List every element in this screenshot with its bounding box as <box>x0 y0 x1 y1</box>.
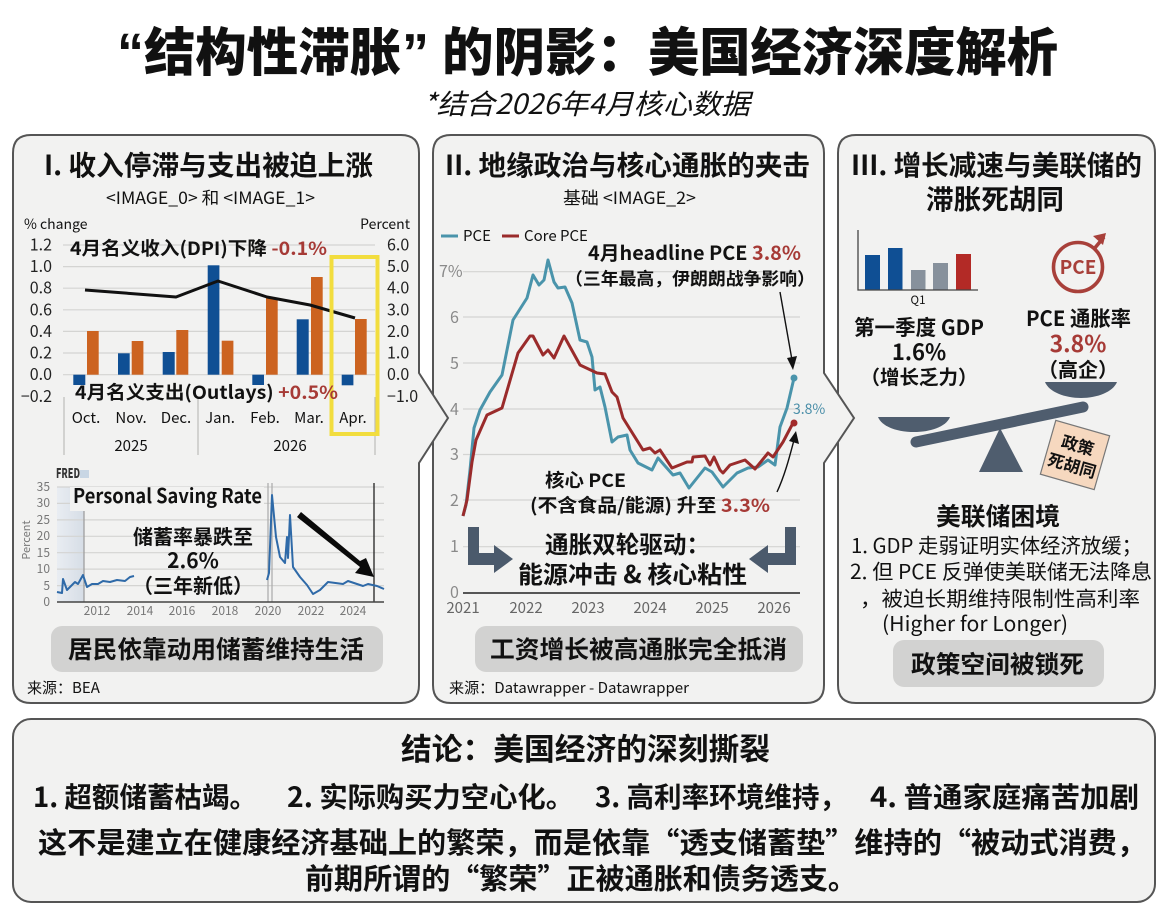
line chart: PCE and core PCE: 3.8% <box>793 399 825 419</box>
text: Fed dilemma: ，被迫长期维持限制性高利率 <box>860 582 1140 612</box>
bar chart: income and outlays: Percent <box>360 214 411 234</box>
text: inflation dual drivers: 能源冲击 & 核心粘性 <box>518 555 747 590</box>
text: Fed dilemma: 1. GDP 走弱证明实体经济放缓； <box>851 529 1142 559</box>
bar chart: income and outlays: 1.0 <box>30 253 52 277</box>
legend: Core PCE <box>524 225 588 246</box>
heading: panel I: I. 收入停滞与支出被迫上涨 <box>44 143 373 183</box>
text: PCE inflation: PCE 通胀率 <box>1026 303 1131 333</box>
icon: GDP bar chart <box>858 230 978 308</box>
line chart: PCE and core PCE <box>439 258 825 618</box>
arrow: to headline PCE point <box>780 292 797 370</box>
line chart: PCE and core PCE: 7% <box>439 258 463 282</box>
line chart: personal saving rate: 2020 <box>255 602 282 619</box>
text: inflation dual drivers <box>518 525 747 590</box>
text: Fed dilemma: 2. 但 PCE 反弹使美联储无法降息 <box>850 555 1152 585</box>
line chart: personal saving rate: 2012 <box>84 602 111 619</box>
legend: PCE <box>463 225 491 246</box>
arrow: saving rate decline <box>297 512 374 577</box>
subheading: image reference: 基础 <IMAGE_2> <box>563 184 696 209</box>
line chart: PCE and core PCE: 1 <box>450 533 459 557</box>
text: Q1 GDP <box>854 312 984 390</box>
line chart: PCE and core PCE: 0 <box>450 579 459 603</box>
heading: panel III <box>851 143 1142 217</box>
bar chart: income and outlays: 0.0 <box>387 361 409 385</box>
line chart: personal saving rate: Personal Saving Rate <box>73 480 262 509</box>
line chart: PCE and core PCE: 2021 <box>446 597 480 618</box>
bar chart: income and outlays: 0.0 <box>30 361 52 385</box>
bar chart: income and outlays: Nov. <box>115 407 147 428</box>
bar chart: income and outlays: 0.4 <box>30 318 52 342</box>
line chart: PCE and core PCE: 2024 <box>633 597 667 618</box>
line chart: PCE and core PCE: 6 <box>450 304 459 328</box>
heading: conclusion: 结论：美国经济的深刻撕裂 <box>401 724 770 769</box>
line chart: personal saving rate: 15 <box>37 544 50 561</box>
line chart: personal saving rate: Percent <box>18 520 34 560</box>
arrow: to core PCE point <box>777 431 799 492</box>
panel: conclusion <box>13 719 1155 902</box>
line chart: personal saving rate: 25 <box>37 511 50 528</box>
line chart: personal saving rate: 35 <box>37 478 50 495</box>
title: ” <box>402 23 429 83</box>
highlight: April box <box>332 257 378 434</box>
text: Q1 GDP: （增长乏力） <box>860 361 978 390</box>
list: four conclusions: 2. 实际购买力空心化。 <box>287 776 574 816</box>
bar chart: income and outlays: 5.0 <box>387 253 409 277</box>
line chart: personal saving rate: 20 <box>37 527 50 544</box>
bar chart: income and outlays: 6.0 <box>387 232 409 256</box>
annotation: saving rate plunge: （三年新低） <box>133 570 253 599</box>
sticky note: policy dead end <box>1040 420 1110 490</box>
text: conclusion summary: 这不是建立在健康经济基础上的繁荣，而是依靠“透支储蓄垫”维持的“被动式消费， <box>38 821 1146 862</box>
line chart: personal saving rate: 2024 <box>340 602 367 619</box>
bar chart: income and outlays: 0.2 <box>30 340 52 364</box>
annotation: saving rate plunge <box>133 521 253 599</box>
line chart: personal saving rate: 2014 <box>127 602 154 619</box>
bar chart: income and outlays: 2025 <box>114 435 148 456</box>
subheading: image references: <IMAGE_0> 和 <IMAGE_1> <box>106 184 315 209</box>
list: four conclusions: 1. 超额储蓄枯竭。 <box>33 776 257 816</box>
line chart: personal saving rate: 30 <box>37 494 50 511</box>
bar chart: income and outlays: 3.0 <box>387 296 409 320</box>
text: Fed dilemma: 美联储困境 <box>936 498 1060 533</box>
annotation: saving rate plunge: 储蓄率暴跌至 <box>133 521 253 550</box>
subtitle: *结合2026年4月核心数据 <box>423 83 754 123</box>
annotation: DPI decline: 4月名义收入(DPI)下降 -0.1% <box>70 235 327 261</box>
callout: households use savings <box>51 626 383 672</box>
line chart: PCE and core PCE: 2 <box>450 487 459 511</box>
panel: geopolitics and core inflation <box>433 135 854 703</box>
line chart: personal saving rate: 2018 <box>212 602 239 619</box>
icon: PCE gauge with rising arrow: PCE <box>1060 253 1096 280</box>
bar chart: income and outlays: Mar. <box>294 407 324 428</box>
bar chart: income and outlays: −1.0 <box>387 383 418 407</box>
line chart: personal saving rate: 2016 <box>169 602 196 619</box>
annotation: core PCE: 核心 PCE <box>545 467 626 493</box>
text: Fed dilemma: (Higher for Longer) <box>882 607 1068 637</box>
bar chart: income and outlays: Oct. <box>72 407 100 428</box>
panel: income stagnation and forced spending <box>13 135 448 703</box>
text: conclusion summary: 前期所谓的“繁荣”正被通胀和债务透支。 <box>305 857 857 898</box>
title <box>117 11 1058 86</box>
source note: 来源：BEA <box>27 677 101 698</box>
line chart: PCE and core PCE: 2026 <box>757 597 791 618</box>
callout: wage growth offset: 工资增长被高通胀完全抵消 <box>490 630 787 666</box>
bar chart: income and outlays: 2026 <box>273 435 307 456</box>
icon: balance scale <box>878 382 1117 472</box>
line chart: personal saving rate: FRED <box>56 463 80 482</box>
bar chart: income and outlays: Feb. <box>250 407 280 428</box>
text: PCE inflation: 3.8% <box>1050 325 1106 359</box>
heading: panel II: II. 地缘政治与核心通胀的夹击 <box>445 143 810 183</box>
text: Q1 GDP: 第一季度 GDP <box>854 312 984 342</box>
bar chart: income and outlays: 0.8 <box>30 274 52 298</box>
line chart: PCE and core PCE: 3 <box>450 441 459 465</box>
title: “ <box>117 23 144 83</box>
bar chart: income and outlays: % change <box>24 214 88 234</box>
title: 的阴影： <box>442 11 648 86</box>
bar chart: income and outlays: −0.2 <box>21 383 52 407</box>
line chart: personal saving rate: 0 <box>43 593 50 610</box>
bar chart: income and outlays: 1.0 <box>387 340 409 364</box>
line chart: personal saving rate <box>18 463 384 619</box>
sticky note: policy dead end: 死胡同 <box>1045 446 1099 483</box>
panel: growth slowdown and Fed dilemma <box>838 135 1155 703</box>
icon: left bent arrow <box>468 527 513 573</box>
annotation: headline PCE: 4月headline PCE 3.8% <box>588 237 801 266</box>
bar chart: income and outlays: Jan. <box>205 407 235 428</box>
annotation: core PCE <box>530 467 770 518</box>
line chart: PCE and core PCE: 2022 <box>509 597 543 618</box>
annotation: headline PCE <box>565 237 815 291</box>
line chart: personal saving rate: 10 <box>37 560 50 577</box>
bar chart: income and outlays: 0.6 <box>30 296 52 320</box>
text: inflation dual drivers: 通胀双轮驱动： <box>545 525 710 560</box>
legend <box>441 225 588 246</box>
callout: households use savings: 居民依靠动用储蓄维持生活 <box>68 630 364 666</box>
icon: PCE gauge with rising arrow <box>1054 233 1106 292</box>
bar chart: income and outlays: Apr. <box>339 407 367 428</box>
source note: 来源：Datawrapper - Datawrapper <box>449 677 689 698</box>
line chart: PCE and core PCE: 5 <box>450 350 459 374</box>
heading: panel III: III. 增长减速与美联储的 <box>851 143 1142 183</box>
list: four conclusions: 4. 普通家庭痛苦加剧 <box>870 776 1139 816</box>
text: PCE inflation: （高企） <box>1038 354 1118 383</box>
icon: GDP bar chart: Q1 <box>911 292 925 308</box>
bar chart: income and outlays: 2.0 <box>387 318 409 342</box>
line chart: PCE and core PCE: 2025 <box>695 597 729 618</box>
list: four conclusions <box>33 776 1139 816</box>
text: PCE inflation <box>1026 303 1131 383</box>
bar chart: income and outlays: 4.0 <box>387 274 409 298</box>
text: Q1 GDP: 1.6% <box>892 335 946 367</box>
line chart: personal saving rate: 2022 <box>298 602 325 619</box>
callout: policy space locked <box>893 640 1104 687</box>
text: Fed dilemma <box>850 498 1152 637</box>
annotation: headline PCE: （三年最高，伊朗朗战争影响） <box>565 266 815 291</box>
text: conclusion summary <box>38 821 1146 898</box>
icon: right bent arrow <box>749 527 796 573</box>
bar chart: income and outlays: Dec. <box>161 407 191 428</box>
bar chart: income and outlays: 1.2 <box>30 232 52 256</box>
line chart: personal saving rate: 5 <box>43 577 50 594</box>
line chart: PCE and core PCE: 4 <box>450 396 459 420</box>
title: 结构性滞胀 <box>144 11 401 86</box>
heading: panel III: 滞胀死胡同 <box>926 177 1064 217</box>
annotation: outlays rise: 4月名义支出(Outlays) +0.5% <box>75 379 338 405</box>
annotation: core PCE: (不含食品/能源) 升至 3.3% <box>530 492 770 518</box>
list: four conclusions: 3. 高利率环境维持， <box>595 776 847 816</box>
title: 美国经济深度解析 <box>648 11 1058 86</box>
line chart: PCE and core PCE: 2023 <box>571 597 605 618</box>
bar chart: income and outlays <box>21 214 418 456</box>
annotation: saving rate plunge: 2.6% <box>167 545 219 575</box>
callout: policy space locked: 政策空间被锁死 <box>911 645 1084 681</box>
sticky note: policy dead end: 政策 <box>1059 428 1098 461</box>
